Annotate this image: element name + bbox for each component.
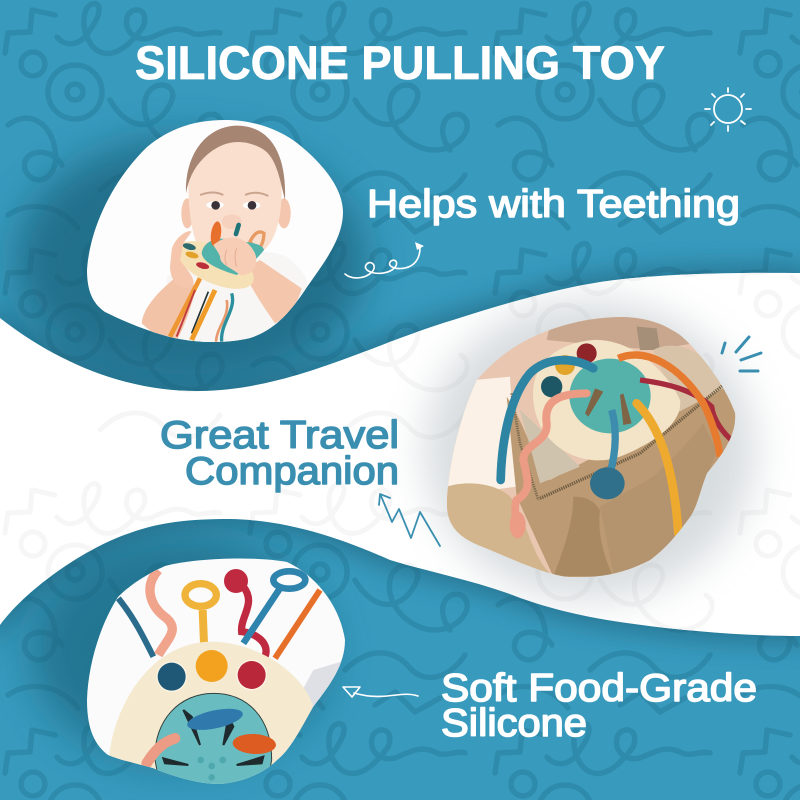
hand left [170, 231, 194, 288]
toy disc [180, 241, 254, 289]
dark shadow behind white wave [0, 273, 800, 636]
cream base [108, 642, 313, 773]
pop buttons [156, 661, 187, 692]
label: great travel companion: Great Travel [160, 414, 399, 457]
strings [170, 278, 200, 337]
icon: spark lines [722, 337, 761, 371]
label: soft food-grade silicone [441, 667, 757, 745]
pull ends [187, 708, 243, 730]
photo: baby with toy [87, 120, 343, 342]
knit fabric [447, 483, 550, 573]
teal dome [569, 359, 651, 433]
toy rings [250, 232, 264, 250]
cloth top right [653, 346, 727, 417]
icon: sun [705, 88, 751, 131]
soft grey shadow behind travel blob [425, 300, 755, 600]
photo: toy parts [80, 555, 350, 790]
teal dome [155, 693, 272, 787]
toy base [533, 340, 680, 460]
right arm [250, 260, 302, 324]
strings [501, 360, 593, 480]
ears [181, 198, 192, 228]
bag [507, 387, 740, 577]
label: soft food-grade silicone: Silicone [441, 702, 587, 745]
label: helps with teething: Helps with Teething [367, 183, 740, 226]
pull strings [118, 598, 153, 657]
left arm [142, 280, 194, 338]
label: great travel companion: Companion [185, 450, 399, 493]
arrow: points to photo [343, 687, 418, 697]
hand right [213, 238, 256, 275]
dark shadow behind food blob [30, 535, 330, 765]
dark shadow behind baby blob [15, 137, 365, 387]
hair [186, 126, 285, 200]
shirt [166, 288, 306, 342]
nose [222, 214, 242, 229]
photo: toy on bag [447, 317, 736, 578]
face [188, 142, 282, 251]
zipper [540, 385, 723, 498]
label: soft food-grade silicone: Soft Food-Grade [441, 667, 757, 710]
label: great travel companion [160, 414, 399, 493]
arrow: zig-zag [379, 494, 440, 546]
arrow: loopy arrow up [345, 242, 424, 278]
faint doodles on white [2, 272, 800, 630]
white wave band [0, 273, 800, 636]
teether [590, 467, 625, 499]
backdrop [448, 376, 516, 489]
title: SILICONE PULLING TOY [135, 36, 665, 89]
eyes [206, 201, 224, 209]
